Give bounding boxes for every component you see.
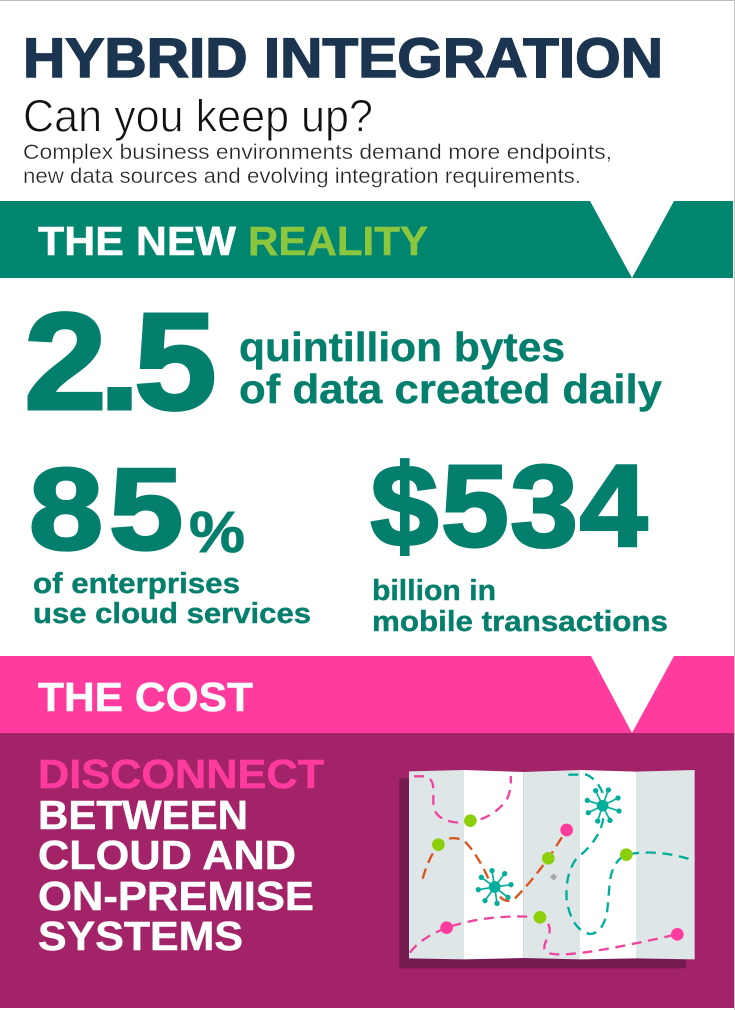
route: pink top <box>414 776 511 823</box>
heading: disconnect between cloud and on-premise systems: BETWEEN <box>38 792 248 838</box>
stat: 534 billion: billion in <box>372 575 496 607</box>
route: teal <box>566 775 695 934</box>
hub: teal lower <box>476 868 514 906</box>
subtitle: Can you keep up? <box>23 90 373 142</box>
intro text: new data sources and evolving integration requirements. <box>23 164 581 188</box>
panel: disconnect <box>0 733 734 1008</box>
icon: small compass mark <box>550 873 557 881</box>
stat: 85 percent <box>29 445 311 630</box>
intro text <box>23 140 612 188</box>
heading: disconnect between cloud and on-premise systems <box>38 751 324 959</box>
route: pink bottom <box>410 916 677 954</box>
heading: disconnect between cloud and on-premise systems: CLOUD AND <box>38 832 296 878</box>
title: HYBRID INTEGRATION <box>23 26 663 89</box>
node: green dots <box>432 814 633 924</box>
heading: disconnect between cloud and on-premise systems: ON-PREMISE <box>38 873 314 919</box>
stat: 85 percent: % <box>189 500 245 565</box>
stat: 534 billion: mobile transactions <box>372 606 668 638</box>
intro text: Complex business environments demand more endpoints, <box>23 140 612 164</box>
stat: 534 billion <box>371 442 668 638</box>
stat: 85 percent: use cloud services <box>33 598 311 630</box>
stat: 85 percent: 85 <box>29 445 183 574</box>
node: pink dots <box>440 824 684 941</box>
stat: 2.5 quintillion bytes: quintillion bytes <box>239 324 565 370</box>
banner: the cost: THE COST <box>38 674 253 720</box>
banner: the new reality: REALITY <box>248 218 428 264</box>
heading: disconnect between cloud and on-premise systems: DISCONNECT <box>38 751 324 797</box>
route: orange <box>423 830 567 901</box>
banner: the cost <box>0 656 734 733</box>
stat: 2.5 quintillion bytes <box>24 285 662 439</box>
banner: the new reality <box>0 201 733 278</box>
stat: 534 billion: $534 <box>371 442 647 571</box>
hub: teal upper <box>585 787 622 824</box>
banner: the new reality: THE NEW <box>38 218 236 264</box>
heading: disconnect between cloud and on-premise systems: SYSTEMS <box>38 913 243 959</box>
stat: 85 percent: of enterprises <box>33 568 240 600</box>
illustration: folded map <box>399 770 695 968</box>
stat: 2.5 quintillion bytes: 2.5 <box>24 285 217 439</box>
stat: 2.5 quintillion bytes: of data created daily <box>239 366 662 412</box>
